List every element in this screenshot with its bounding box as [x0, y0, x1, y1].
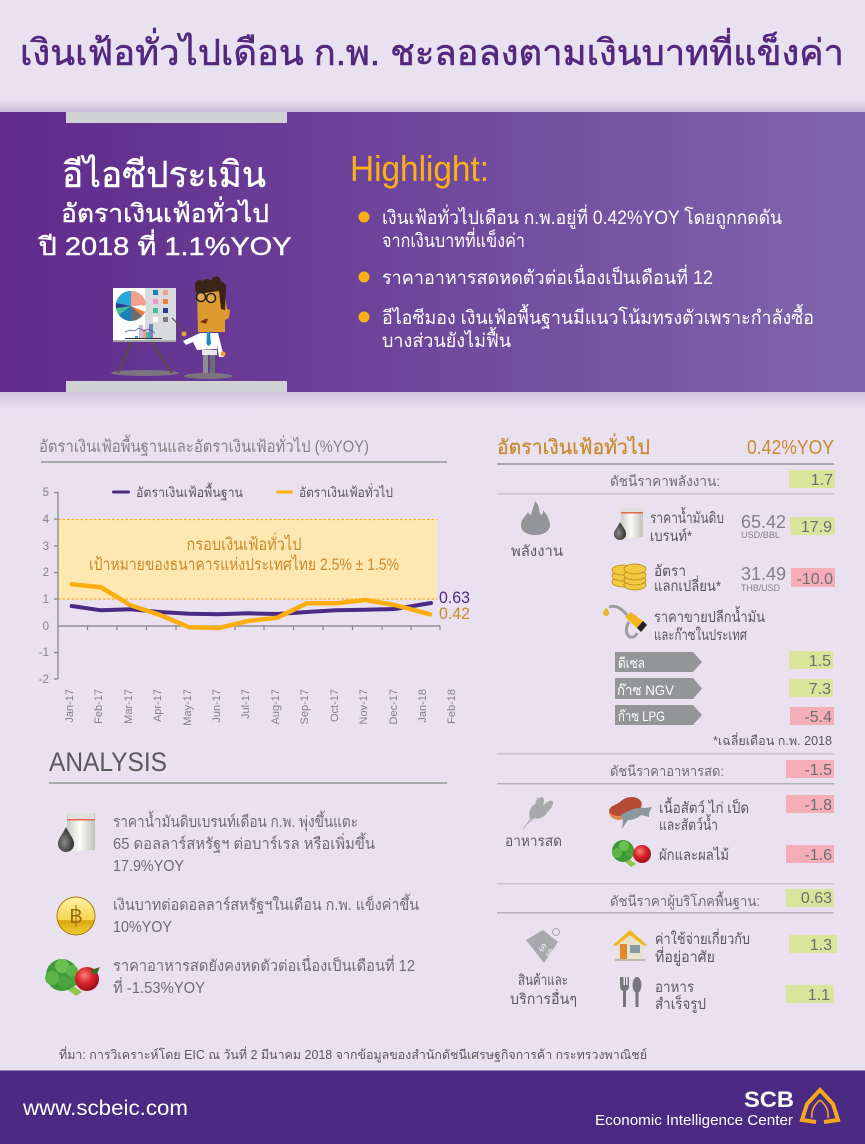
- y axis labels: 2: [43, 567, 49, 579]
- x axis labels: Jan-18: [417, 689, 429, 723]
- icon: vegetables: [45, 959, 100, 996]
- row: brent: 17.9: [801, 519, 832, 536]
- row: exchange rate: [612, 563, 835, 595]
- y axis labels: -2: [39, 674, 49, 686]
- analysis text: oil: ราคาน้ำมันดิบเบรนท์เดือน ก.พ. พุ่งขึ้นแตะ: [113, 810, 358, 832]
- legend: อัตราเงินเฟ้อทั่วไป: [299, 483, 393, 500]
- row: housing: ค่าใช้จ่ายเกี่ยวกับ: [655, 928, 750, 948]
- row: brent: USD/BBL: [741, 530, 780, 541]
- row: fresh food index: ดัชนีราคาอาหารสด:: [610, 763, 724, 779]
- row: exchange rate: 31.49: [741, 563, 786, 584]
- analysis text: fresh food: ที่ -1.53%YOY: [113, 977, 205, 997]
- analysis text: baht: เงินบาทต่อดอลลาร์สหรัฐฯในเดือน ก.พ. แข็งค่าขึ้น: [113, 893, 419, 914]
- footnote: *เฉลี่ยเดือน ก.พ. 2018: [713, 732, 832, 748]
- title: เงินเฟ้อทั่วไปเดือน ก.พ. ชะลอลงตามเงินบาทที่แข็งค่า: [20, 28, 844, 73]
- x axis labels: Mar-17: [123, 689, 135, 724]
- icon: presenter with chart board: [111, 276, 232, 379]
- x axis labels: Nov-17: [358, 689, 370, 724]
- row: LPG: ก๊าซ LPG: [618, 708, 665, 724]
- category: other goods and services: สินค้าและ: [518, 972, 568, 989]
- panel: inflation chart: 0.42: [439, 605, 470, 623]
- category: energy: [511, 501, 563, 560]
- y axis labels: -1: [39, 647, 49, 659]
- x axis labels: Feb-18: [446, 689, 458, 724]
- panel: inflation chart: [39, 434, 470, 726]
- row: brent: 65.42: [741, 511, 786, 532]
- icon: price tag: [526, 928, 560, 963]
- row: diesel: 1.5: [809, 653, 831, 670]
- x axis labels: Aug-17: [270, 689, 282, 724]
- line: core inflation: [72, 603, 431, 614]
- footer: Economic Intelligence Center: [595, 1112, 793, 1129]
- analysis text: oil: 65 ดอลลาร์สหรัฐฯ ต่อบาร์เรล หรือเพิ่มขึ้น: [113, 832, 375, 853]
- row: meat and fish: เนื้อสัตว์ ไก่ เป็ด: [659, 797, 749, 817]
- website: www.scbeic.com: [22, 1097, 188, 1120]
- bullet list: [358, 204, 814, 352]
- x axis labels: [64, 689, 458, 726]
- row: NGV: 7.3: [809, 681, 831, 698]
- row: meat and fish: และสัตว์น้ำ: [659, 814, 718, 834]
- icon: price tag: $: [536, 942, 548, 955]
- icon: SCB logo: [802, 1090, 838, 1122]
- row: retail fuel: ราคาขายปลีกน้ำมัน: [654, 606, 765, 626]
- panel: inflation breakdown: [497, 433, 837, 1013]
- bullet list: ราคาอาหารสดหดตัวต่อเนื่องเป็นเดือนที่ 12: [382, 264, 713, 289]
- row: core index: ดัชนีราคาผู้บริโภคพื้นฐาน:: [610, 891, 760, 910]
- x axis labels: Feb-17: [93, 689, 105, 724]
- row: housing: [613, 928, 837, 966]
- y axis labels: 5: [43, 487, 49, 499]
- category: fresh food: [505, 796, 562, 850]
- category: energy: พลังงาน: [511, 544, 563, 560]
- panel: inflation breakdown: 0.42%YOY: [747, 437, 834, 459]
- SCB wordmark: SCB: [744, 1087, 794, 1112]
- analysis heading: ANALYSIS: [49, 747, 167, 777]
- line: headline inflation: [72, 584, 430, 628]
- row: ready-to-eat food: 1.1: [808, 987, 830, 1004]
- category: other goods and services: บริการอื่นๆ: [510, 989, 577, 1008]
- row: vegetables and fruit: -1.6: [804, 847, 832, 864]
- icon: baht coin: B: [69, 906, 83, 928]
- panel: highlight band: [0, 100, 865, 410]
- x axis labels: Jan-17: [64, 689, 76, 723]
- category: fresh food: อาหารสด: [505, 834, 562, 850]
- row: core index: [610, 889, 834, 910]
- row: fresh food index: -1.5: [804, 762, 832, 779]
- analysis text: baht: 10%YOY: [113, 919, 172, 936]
- x axis labels: Oct-17: [329, 689, 341, 722]
- heading: Highlight: Highlight:: [350, 148, 489, 189]
- icon: baht coin: [57, 897, 95, 935]
- row: meat and fish: -1.8: [804, 797, 832, 814]
- row: housing: ที่อยู่อาศัย: [655, 946, 715, 966]
- heading: EIC forecast: [38, 154, 292, 261]
- row: brent: เบรนท์*: [650, 528, 692, 545]
- row: vegetables and fruit: [612, 840, 834, 867]
- row: core index: 0.63: [801, 890, 832, 907]
- bullet list: จากเงินบาทที่แข็งค่า: [382, 227, 525, 252]
- bullet list: เงินเฟ้อทั่วไปเดือน ก.พ.อยู่ที่ 0.42%YOY โดยถูกกดดัน: [382, 204, 782, 229]
- analysis text: oil: [113, 810, 375, 875]
- row: brent: ราคาน้ำมันดิบ: [650, 507, 724, 527]
- heading: EIC forecast: ปี 2018 ที่ 1.1%YOY: [38, 229, 292, 261]
- footer: [0, 1070, 865, 1144]
- row: housing: 1.3: [810, 937, 832, 954]
- end labels: 0.63: [439, 589, 470, 607]
- y axis labels: 0: [43, 621, 49, 633]
- row: ready-to-eat food: [620, 977, 834, 1013]
- row: energy index: [610, 470, 835, 489]
- x axis labels: Jun-17: [211, 689, 223, 723]
- y axis labels: 4: [43, 514, 50, 526]
- row: energy index: 1.7: [811, 472, 833, 489]
- row: exchange rate: THB/USD: [741, 583, 780, 594]
- heading: EIC forecast: อีไอซีประเมิน: [62, 154, 266, 195]
- breakdown heading: อัตราเงินเฟ้อทั่วไป: [497, 433, 650, 459]
- x axis labels: May-17: [182, 689, 194, 726]
- row: energy index: ดัชนีราคาพลังงาน:: [610, 473, 720, 489]
- panel: analysis: [45, 747, 447, 997]
- analysis text: oil: 17.9%YOY: [113, 858, 184, 875]
- x axis labels: Apr-17: [152, 689, 164, 722]
- icon: flame: [521, 501, 550, 535]
- row: NGV: ก๊าซ NGV: [617, 682, 675, 698]
- y axis labels: [39, 487, 50, 686]
- row: ready-to-eat food: อาหาร: [655, 979, 694, 996]
- target band: [58, 519, 437, 599]
- row: NGV: [615, 678, 833, 699]
- row: retail fuel: [603, 606, 765, 644]
- y axis labels: 3: [43, 541, 49, 553]
- row: diesel: ดีเซล: [618, 655, 645, 671]
- row: retail fuel: และก๊าซในประเทศ: [654, 626, 747, 644]
- chart heading: อัตราเงินเฟ้อพื้นฐานและอัตราเงินเฟ้อทั่วไป (%YOY): [39, 434, 369, 456]
- bullet list: บางส่วนยังไม่ฟื้น: [382, 327, 511, 352]
- analysis text: fresh food: ราคาอาหารสดยังคงหดตัวต่อเนื่องเป็นเดือนที่ 12: [113, 955, 415, 975]
- row: brent: [614, 507, 835, 545]
- highlights: [350, 148, 814, 352]
- x axis labels: Jul-17: [240, 689, 252, 719]
- y axis labels: 1: [43, 594, 49, 606]
- analysis text: baht: [113, 893, 419, 936]
- target band: กรอบเงินเฟ้อทั่วไป: [186, 532, 302, 554]
- category: other goods and services: [510, 928, 577, 1008]
- icon: price tag: $: [543, 947, 555, 960]
- icon: oil tank: [58, 813, 95, 852]
- analysis text: fresh food: [113, 955, 415, 997]
- row: exchange rate: แลกเปลี่ยน*: [654, 575, 721, 595]
- x axis labels: Sep-17: [299, 689, 311, 724]
- heading: EIC forecast: อัตราเงินเฟ้อทั่วไป: [61, 196, 269, 228]
- axes: [54, 492, 440, 679]
- row: exchange rate: -10.0: [797, 571, 833, 588]
- row: meat and fish: [609, 795, 834, 834]
- source note: ที่มา: การวิเคราะห์โดย EIC ณ วันที่ 2 มีนาคม 2018 จากข้อมูลของสำนักดัชนีเศรษฐกิจการค้า กระทรวงพาณิชย์: [59, 1046, 647, 1063]
- target band: เป้าหมายของธนาคารแห่งประเทศไทย 2.5% ± 1.5%: [89, 554, 399, 574]
- row: ready-to-eat food: สำเร็จรูป: [655, 994, 706, 1013]
- row: LPG: -5.4: [804, 709, 832, 726]
- row: diesel: [615, 651, 833, 672]
- row: vegetables and fruit: ผักและผลไม้: [659, 846, 729, 864]
- row: exchange rate: อัตรา: [654, 563, 686, 580]
- icon: wheat: [523, 796, 555, 829]
- legend: [112, 482, 393, 501]
- row: LPG: [615, 705, 834, 726]
- row: fresh food index: [610, 760, 834, 779]
- bullet list: อีไอซีมอง เงินเฟ้อพื้นฐานมีแนวโน้มทรงตัวเพราะกำลังซื้อ: [382, 304, 814, 329]
- legend: อัตราเงินเฟ้อพื้นฐาน: [136, 482, 243, 501]
- x axis labels: Dec-17: [388, 689, 400, 724]
